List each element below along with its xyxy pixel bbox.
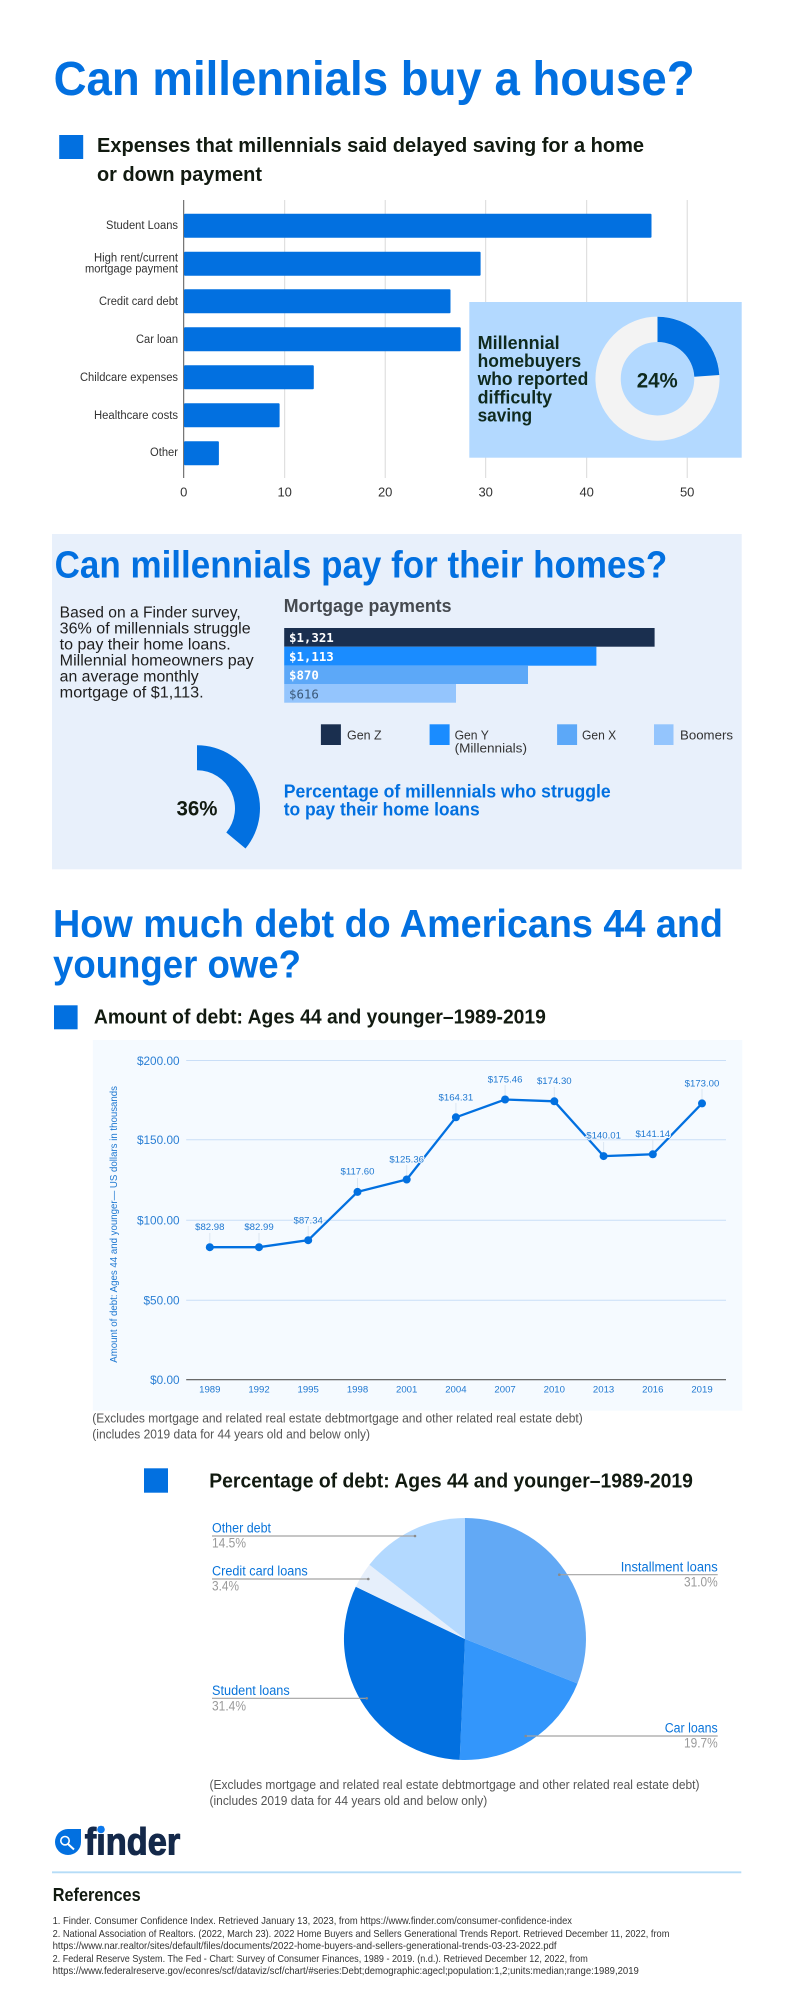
x axis labels: 1989 bbox=[199, 1384, 220, 1395]
bar: high rent bbox=[85, 252, 481, 276]
x axis labels: 2010 bbox=[544, 1384, 565, 1395]
bar: healthcare: Healthcare costs bbox=[94, 410, 178, 422]
text: difficulty saving: homebuyers bbox=[478, 351, 581, 371]
data labels: $87.34 bbox=[294, 1215, 324, 1226]
donut chart: 24%: 24% bbox=[637, 368, 678, 392]
x axis labels: 40 bbox=[579, 485, 594, 500]
data labels: $117.60 bbox=[341, 1167, 374, 1178]
bar: car loan bbox=[136, 327, 461, 351]
data labels: $175.46 bbox=[488, 1074, 522, 1085]
legend: Boomers bbox=[680, 728, 733, 742]
heading: references: References bbox=[53, 1884, 141, 1905]
heading: expenses: Expenses that millennials said delayed saving for a home bbox=[97, 135, 644, 157]
bar: other: Other bbox=[150, 447, 178, 459]
x axis labels: 2013 bbox=[593, 1384, 614, 1395]
data labels: $173.00 bbox=[685, 1078, 719, 1089]
label: student loans: 31.4% bbox=[212, 1698, 246, 1713]
data labels: $174.30 bbox=[537, 1076, 572, 1087]
label: credit card loans: 3.4% bbox=[212, 1579, 239, 1594]
note: line chart: (includes 2019 data for 44 years old and below only) bbox=[92, 1428, 370, 1442]
label: other debt: Other debt bbox=[212, 1521, 271, 1536]
text: finder survey bbox=[60, 604, 254, 701]
slice: car loans bbox=[460, 1639, 578, 1760]
label: other debt: 14.5% bbox=[212, 1535, 246, 1550]
bar: healthcare bbox=[94, 403, 280, 427]
text: finder survey: Millennial homeowners pay bbox=[60, 652, 254, 669]
note: line chart bbox=[92, 1412, 583, 1442]
heading: how much debt: younger owe? bbox=[53, 943, 301, 986]
heading: how much debt bbox=[53, 903, 723, 986]
heading: amount of debt: Amount of debt: Ages 44 and younger–1989-2019 bbox=[94, 1006, 546, 1028]
heading: expenses: or down payment bbox=[97, 164, 262, 186]
slice: other debt bbox=[369, 1518, 465, 1639]
text: difficulty saving: who reported bbox=[477, 369, 588, 389]
y axis labels: $100.00 bbox=[137, 1214, 180, 1228]
bar: other bbox=[150, 441, 219, 465]
bar: car loan: Car loan bbox=[136, 334, 178, 346]
label: student loans bbox=[212, 1683, 368, 1713]
icon: section marker expenses bbox=[59, 135, 83, 159]
x axis labels: 1992 bbox=[248, 1384, 270, 1395]
text: references list: https://www.federalreserve.gov/econres/scf/dataviz/scf/chart/#series:Debt;demographic:agecl;population:1,2;units:median;range:1989,2019 bbox=[53, 1965, 639, 1977]
data points bbox=[206, 1096, 706, 1251]
legend: Gen X bbox=[582, 728, 617, 742]
bar: boomers bbox=[284, 684, 456, 703]
label: installment loans: Installment loans bbox=[621, 1559, 718, 1574]
label: installment loans: 31.0% bbox=[684, 1574, 718, 1589]
y axis labels: $0.00 bbox=[150, 1373, 180, 1387]
x axis labels: 30 bbox=[478, 485, 493, 500]
y axis labels: $200.00 bbox=[137, 1054, 180, 1068]
label: other debt bbox=[212, 1521, 416, 1550]
x axis labels: 0 bbox=[180, 485, 187, 500]
heading: percentage of debt: Percentage of debt: Ages 44 and younger–1989-2019 bbox=[209, 1470, 693, 1492]
label: car loans: Car loans bbox=[665, 1721, 718, 1736]
icon: section marker amount of debt bbox=[54, 1005, 78, 1029]
bar: gen y: $1,113 bbox=[289, 649, 334, 664]
text: references list: https://www.nar.realtor/sites/default/files/documents/2022-home-buyers-and-sellers-generational-trends-03-23-2022.pdf bbox=[53, 1940, 557, 1952]
data labels: $82.99 bbox=[244, 1222, 274, 1233]
note: pie chart: (includes 2019 data for 44 years old and below only) bbox=[210, 1794, 487, 1808]
logo: finder: finder bbox=[85, 1822, 180, 1864]
data labels: $140.01 bbox=[586, 1131, 621, 1142]
bar: gen y bbox=[284, 647, 596, 666]
data labels: $141.14 bbox=[635, 1129, 671, 1140]
label: credit card loans: Credit card loans bbox=[212, 1563, 308, 1578]
donut chart: 24% bbox=[608, 317, 719, 428]
bar: childcare bbox=[80, 365, 314, 389]
label: car loans bbox=[524, 1721, 718, 1751]
text: references list: 1. Finder. Consumer Confidence Index. Retrieved January 13, 2023, from https://www.finder.com/consumer-confidence-index bbox=[53, 1915, 573, 1927]
x axis labels: 1995 bbox=[298, 1384, 319, 1395]
data labels: $164.31 bbox=[439, 1092, 473, 1103]
x axis labels: 2001 bbox=[396, 1384, 417, 1395]
label: car loans: 19.7% bbox=[684, 1736, 718, 1751]
text: finder survey: 36% of millennials struggle bbox=[60, 620, 251, 637]
y axis labels: $50.00 bbox=[144, 1294, 180, 1308]
x axis labels bbox=[199, 1384, 713, 1395]
y axis labels bbox=[137, 1054, 180, 1387]
heading: mortgage payments: Mortgage payments bbox=[284, 595, 452, 616]
arc chart: 36%: 36% bbox=[176, 797, 218, 821]
label: student loans: Student loans bbox=[212, 1683, 290, 1698]
legend bbox=[321, 724, 733, 755]
bar chart: mortgage payments bbox=[284, 628, 655, 703]
x axis labels: 50 bbox=[680, 485, 694, 500]
icon: shield with magnifier bbox=[55, 1829, 81, 1855]
note: pie chart bbox=[210, 1778, 700, 1808]
text: difficulty saving: saving bbox=[478, 406, 532, 426]
text: finder survey: an average monthly bbox=[60, 668, 199, 685]
note: pie chart: (Excludes mortgage and related real estate debtmortgage and other related real estate debt) bbox=[210, 1778, 700, 1792]
text: difficulty saving bbox=[477, 333, 588, 426]
bar chart: expenses bbox=[80, 200, 694, 500]
text: references list: 2. Federal Reserve System. The Fed - Chart: Survey of Consumer Finances, 1989 - 2019. (n.d.). Retrieved December 12, 2022, from bbox=[53, 1953, 588, 1965]
y axis title: Amount of debt: Ages 44 and younger— US dollars in thousands bbox=[108, 1086, 120, 1363]
title: Can millennials buy a house? bbox=[54, 53, 695, 106]
text: references list: 2. National Association of Realtors. (2022, March 23). 2022 Home Buyers and Sellers Generational Trends Report. Retrieved December 11, 2022, from bbox=[53, 1928, 670, 1940]
data labels: $125.36 bbox=[389, 1154, 424, 1165]
label: credit card loans bbox=[212, 1563, 370, 1594]
bar: high rent: High rent/current bbox=[94, 252, 179, 264]
text: percentage who struggle: Percentage of millennials who struggle bbox=[284, 781, 611, 801]
x axis labels: 10 bbox=[277, 485, 292, 500]
legend: Gen Z bbox=[347, 728, 382, 742]
bar: student loans bbox=[106, 214, 652, 238]
legend: (Millennials) bbox=[455, 741, 527, 755]
label: installment loans bbox=[558, 1559, 718, 1589]
bar: credit card debt bbox=[99, 289, 450, 313]
text: difficulty saving: Millennial bbox=[478, 333, 560, 353]
note: line chart: (Excludes mortgage and related real estate debtmortgage and other related real estate debt) bbox=[92, 1412, 583, 1426]
data labels: $82.98 bbox=[195, 1222, 224, 1233]
x axis labels: 2007 bbox=[494, 1384, 516, 1395]
data labels bbox=[195, 1074, 719, 1233]
heading: expenses bbox=[97, 135, 644, 186]
bar: gen z bbox=[284, 628, 655, 647]
bar: credit card debt: Credit card debt bbox=[99, 296, 179, 308]
line series bbox=[210, 1100, 702, 1247]
legend: Gen Y bbox=[455, 728, 489, 742]
heading: pay for homes: Can millennials pay for their homes? bbox=[55, 544, 667, 586]
panel: can millennials pay bbox=[52, 534, 742, 869]
bar: childcare: Childcare expenses bbox=[80, 372, 178, 384]
slice: student loans bbox=[344, 1587, 465, 1760]
slice: installment loans bbox=[465, 1518, 586, 1684]
x axis labels: 1998 bbox=[347, 1384, 368, 1395]
panel: homebuyers difficulty saving bbox=[469, 302, 742, 458]
text: percentage who struggle bbox=[284, 781, 611, 819]
bar: gen x bbox=[284, 666, 528, 684]
x axis labels bbox=[180, 485, 694, 500]
text: finder survey: mortgage of $1,113. bbox=[60, 684, 204, 701]
text: finder survey: to pay their home loans. bbox=[60, 636, 231, 653]
x axis labels: 2004 bbox=[445, 1384, 467, 1395]
bar: gen z: $1,321 bbox=[289, 630, 334, 645]
x axis labels: 2019 bbox=[691, 1384, 713, 1395]
x axis labels: 20 bbox=[378, 485, 392, 500]
x axis labels: 2016 bbox=[642, 1384, 663, 1395]
slice: credit card loans bbox=[356, 1565, 465, 1639]
text: finder survey: Based on a Finder survey, bbox=[60, 604, 241, 621]
bar: gen x: $870 bbox=[289, 668, 319, 683]
bar: high rent: mortgage payment bbox=[85, 264, 179, 276]
bar: student loans: Student Loans bbox=[106, 220, 178, 232]
text: references list bbox=[53, 1915, 670, 1977]
pie chart: debt share bbox=[212, 1518, 718, 1760]
arc chart: 36% bbox=[176, 745, 260, 848]
text: difficulty saving: difficulty bbox=[478, 387, 552, 407]
panel: line chart debt amount bbox=[93, 1040, 742, 1411]
icon: section marker percentage of debt bbox=[144, 1468, 168, 1493]
bar: boomers: $616 bbox=[289, 686, 319, 701]
y axis labels: $150.00 bbox=[137, 1133, 180, 1147]
text: percentage who struggle: to pay their home loans bbox=[284, 799, 480, 819]
heading: how much debt: How much debt do Americans 44 and bbox=[53, 903, 723, 946]
